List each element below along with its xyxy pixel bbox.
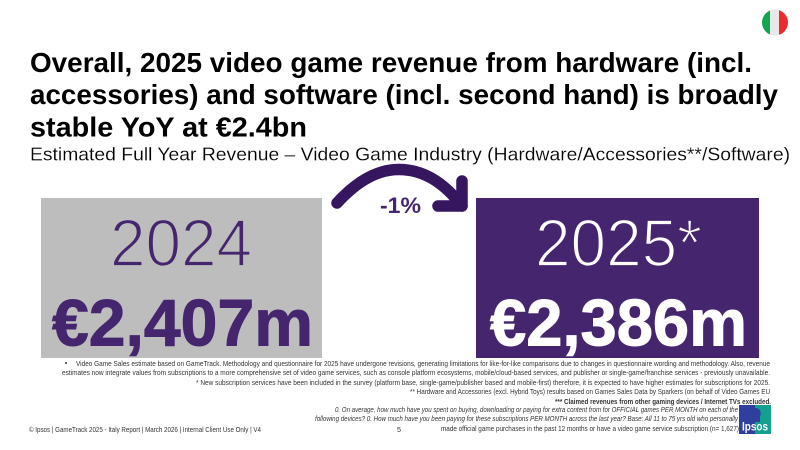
title: Overall, 2025 video game revenue from hardware (incl. <box>30 47 752 78</box>
page number: 5 <box>397 425 401 434</box>
icon: Ipsos logo: Ipsos <box>742 422 768 434</box>
year 2025: 2025* <box>535 206 702 281</box>
change label: -1% <box>380 193 421 218</box>
subtitle: Estimated Full Year Revenue – Video Game Industry (Hardware/Accessories**/Software) <box>30 144 790 164</box>
footer credit: © Ipsos | GameTrack 2025 - Italy Report | March 2026 | Internal Client Use Only | V4 <box>29 425 261 434</box>
title <box>30 47 779 142</box>
panel: 2025 <box>476 198 759 360</box>
value 2024: €2,407m <box>52 286 313 360</box>
footnotes: made official game purchases in the past 12 months or have a video game service subscription (n= 1,627) <box>441 424 739 433</box>
icon: Ipsos logo <box>739 405 771 434</box>
footnotes: following devices? 0. How much have you been paying for these subscriptions PER MONTH across the last year? Base: All 11 to 75 yrs old who personally <box>315 414 738 423</box>
footnotes <box>62 359 771 433</box>
year 2024: 2024 <box>110 206 252 281</box>
title: stable YoY at €2.4bn <box>30 112 307 142</box>
footnotes: 0. On average, how much have you spent on buying, downloading or paying for extra content from for OFFICIAL games PER MONTH on each of the <box>335 405 738 414</box>
value 2025: €2,386m <box>490 286 747 360</box>
panel: 2024 <box>41 198 322 360</box>
title: accessories) and software (incl. second hand) is broadly <box>30 79 779 110</box>
icon: Italian flag <box>762 9 789 36</box>
arrow: year-on-year change <box>337 170 462 206</box>
footnotes: *** Claimed revenues from other gaming devices / Internet TVs excluded. <box>555 397 771 406</box>
